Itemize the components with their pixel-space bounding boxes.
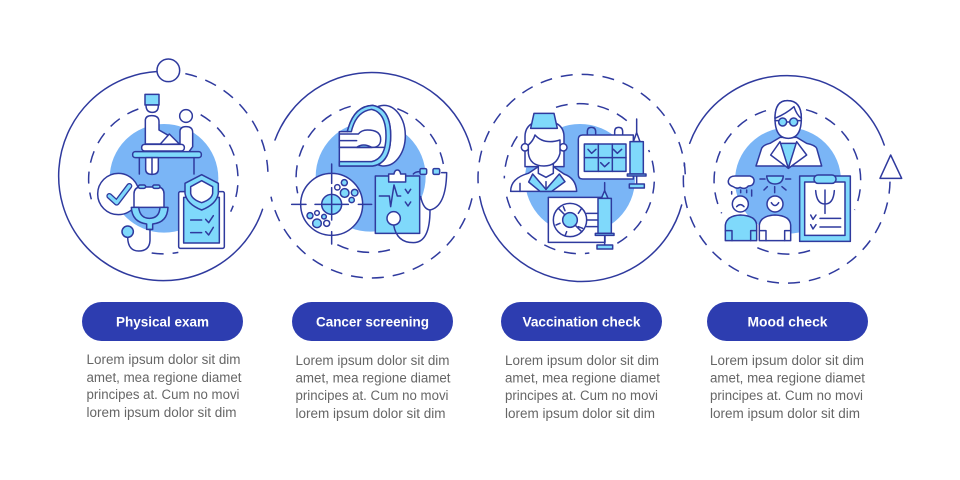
text block: vaccination check: amet, mea regione diamet	[505, 370, 660, 386]
text block: cancer screening	[296, 353, 451, 421]
inner dashed ring	[89, 109, 238, 254]
inner dashed ring	[504, 104, 654, 254]
text block: cancer screening: principes at. Cum no movi	[296, 388, 448, 403]
pill heading: physical exam	[82, 302, 243, 341]
start marker circle	[157, 59, 180, 82]
pill heading: physical exam: Physical exam	[116, 314, 209, 330]
icon: MRI scanner	[339, 105, 405, 166]
step 3 circle: vaccination check	[478, 74, 685, 282]
icon: stethoscope	[122, 185, 168, 251]
outer solid ring arc	[275, 72, 471, 150]
text block: physical exam: lorem ipsum dolor sit dim	[86, 405, 236, 420]
inner dashed ring	[714, 110, 861, 254]
text block: mood check	[710, 353, 865, 421]
text block: vaccination check: lorem ipsum dolor sit dim	[505, 406, 655, 421]
outer dashed ring arc	[185, 74, 268, 176]
text block: physical exam: amet, mea regione diamet	[86, 370, 242, 385]
pill heading: vaccination check	[501, 302, 662, 341]
blue backdrop circle	[316, 122, 426, 232]
outer dashed ring arc	[478, 74, 685, 183]
text block: vaccination check: Lorem ipsum dolor sit dim	[505, 353, 659, 368]
icon: syringe upper	[627, 119, 646, 188]
icon: clipboard with shield	[179, 175, 224, 248]
icon: syringe lower	[595, 183, 614, 249]
icon: sad child under cloud	[725, 176, 757, 241]
text block: mood check: principes at. Cum no movi	[710, 388, 863, 403]
text block: vaccination check: principes at. Cum no movi	[505, 388, 658, 403]
text block: cancer screening: amet, mea regione diamet	[296, 370, 451, 386]
step 1 circle: physical exam	[59, 59, 268, 281]
text block: physical exam: Lorem ipsum dolor sit dim	[86, 352, 240, 367]
outer dashed ring arc	[271, 197, 472, 278]
outer dashed ring arc	[683, 163, 890, 283]
pill heading: vaccination check: Vaccination check	[522, 314, 641, 330]
icon: nurse	[511, 113, 577, 191]
icon: calendar	[578, 127, 633, 179]
text block: mood check: lorem ipsum dolor sit dim	[710, 406, 860, 421]
icon: psychology clipboard	[800, 175, 850, 241]
blue backdrop circle	[525, 124, 635, 234]
step 4 circle: mood check	[683, 76, 902, 283]
text block: mood check: Lorem ipsum dolor sit dim	[710, 353, 864, 368]
text block: cancer screening: lorem ipsum dolor sit dim	[296, 406, 446, 421]
outer solid ring arc	[480, 197, 682, 282]
icon: happy child under sun	[759, 176, 791, 241]
pill heading: mood check	[707, 302, 868, 341]
icon: stethoscope tube	[387, 169, 447, 243]
icon: check mark badge	[98, 173, 139, 215]
outer solid ring arc	[690, 76, 884, 145]
text block: mood check: amet, mea regione diamet	[710, 370, 865, 386]
icon: clipboard with heartbeat	[375, 170, 420, 233]
text block: cancer screening: Lorem ipsum dolor sit dim	[296, 353, 450, 368]
outer solid ring arc	[59, 71, 263, 281]
pill heading: cancer screening: Cancer screening	[316, 314, 429, 330]
icon: cell target	[292, 164, 372, 244]
blue backdrop circle	[110, 124, 218, 233]
pill heading: mood check: Mood check	[748, 314, 828, 330]
text block: physical exam	[86, 352, 242, 420]
end marker triangle	[880, 155, 902, 178]
step 2 circle: cancer screening	[271, 72, 472, 278]
text block: physical exam: principes at. Cum no movi	[86, 387, 240, 402]
text block: vaccination check	[505, 353, 660, 421]
blue backdrop circle	[735, 128, 841, 234]
icon: doctor examining patient	[133, 94, 201, 174]
pill heading: cancer screening	[292, 302, 453, 341]
icon: psychologist	[756, 101, 822, 168]
inner dashed ring	[296, 106, 445, 252]
icon: virus card	[548, 197, 605, 242]
